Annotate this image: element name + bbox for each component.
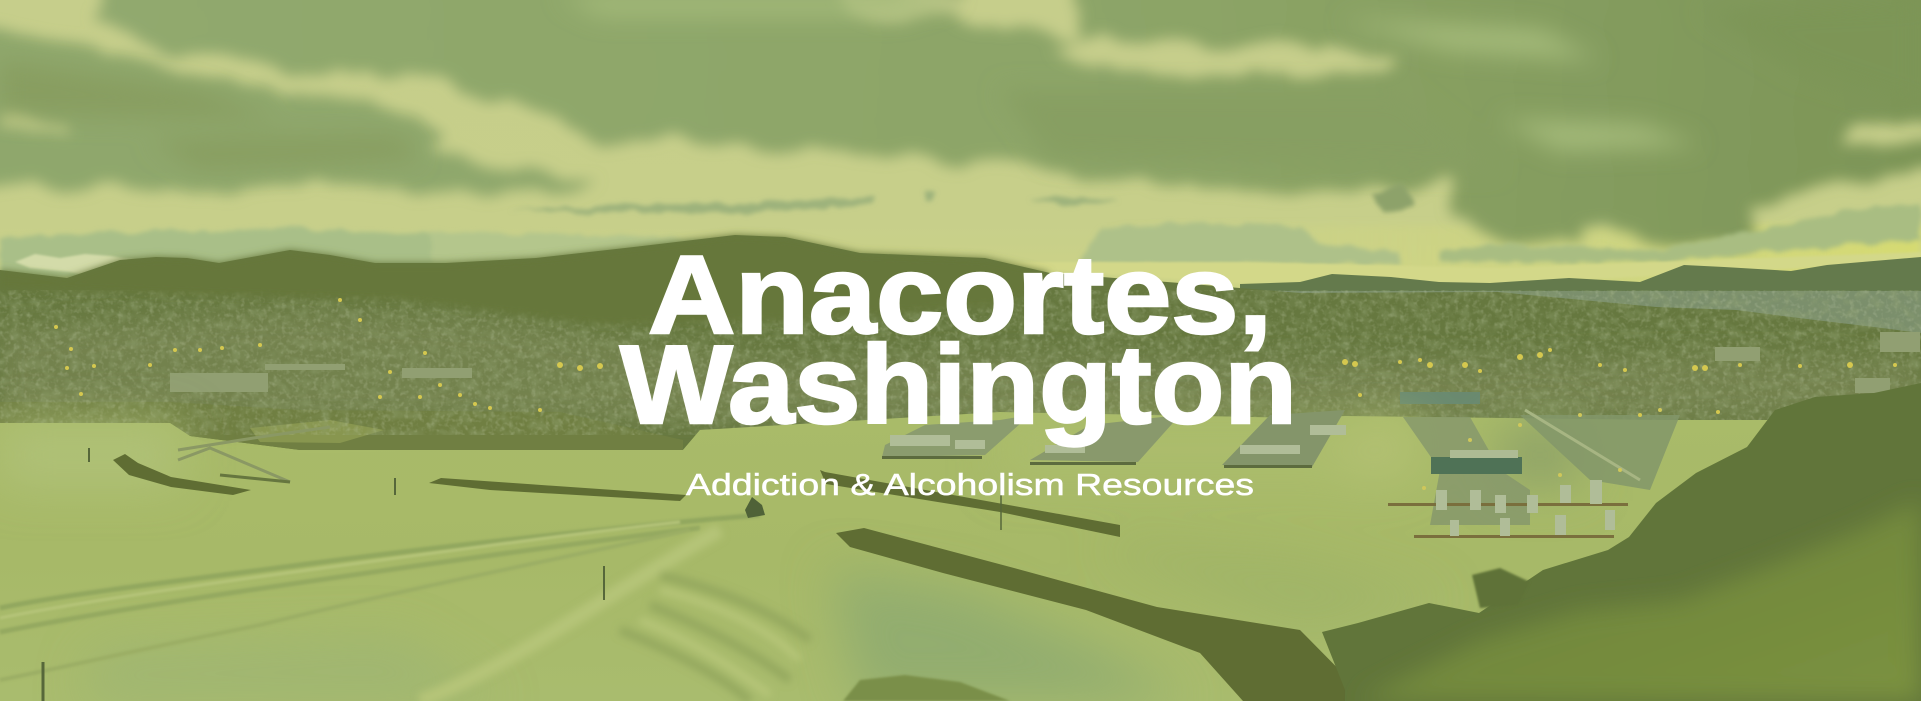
clouds xyxy=(0,0,1921,280)
bright horizon xyxy=(1000,252,1921,284)
horizon haze xyxy=(0,205,1921,280)
distant hills and far water xyxy=(1240,257,1921,340)
channel markers xyxy=(43,448,1001,701)
breakwaters xyxy=(113,454,1370,701)
title xyxy=(620,233,1297,447)
shrubs at bottom xyxy=(843,675,1010,701)
light on water xyxy=(0,420,1580,701)
marina boats and docks xyxy=(882,410,1680,538)
hillside xyxy=(1322,383,1921,701)
boat xyxy=(745,497,765,518)
cloud highlights and shadows xyxy=(0,0,1921,170)
sky xyxy=(0,0,1921,300)
boat wakes xyxy=(0,515,760,680)
town lights xyxy=(54,298,1897,417)
pier xyxy=(178,427,330,482)
subtitle: Addiction & Alcoholism Resources xyxy=(686,467,1254,502)
land with hills and town xyxy=(0,235,1921,450)
title: Anacortes, xyxy=(648,233,1272,357)
title: Washington xyxy=(620,323,1297,447)
water xyxy=(0,412,1921,701)
marina lights xyxy=(1422,408,1662,490)
